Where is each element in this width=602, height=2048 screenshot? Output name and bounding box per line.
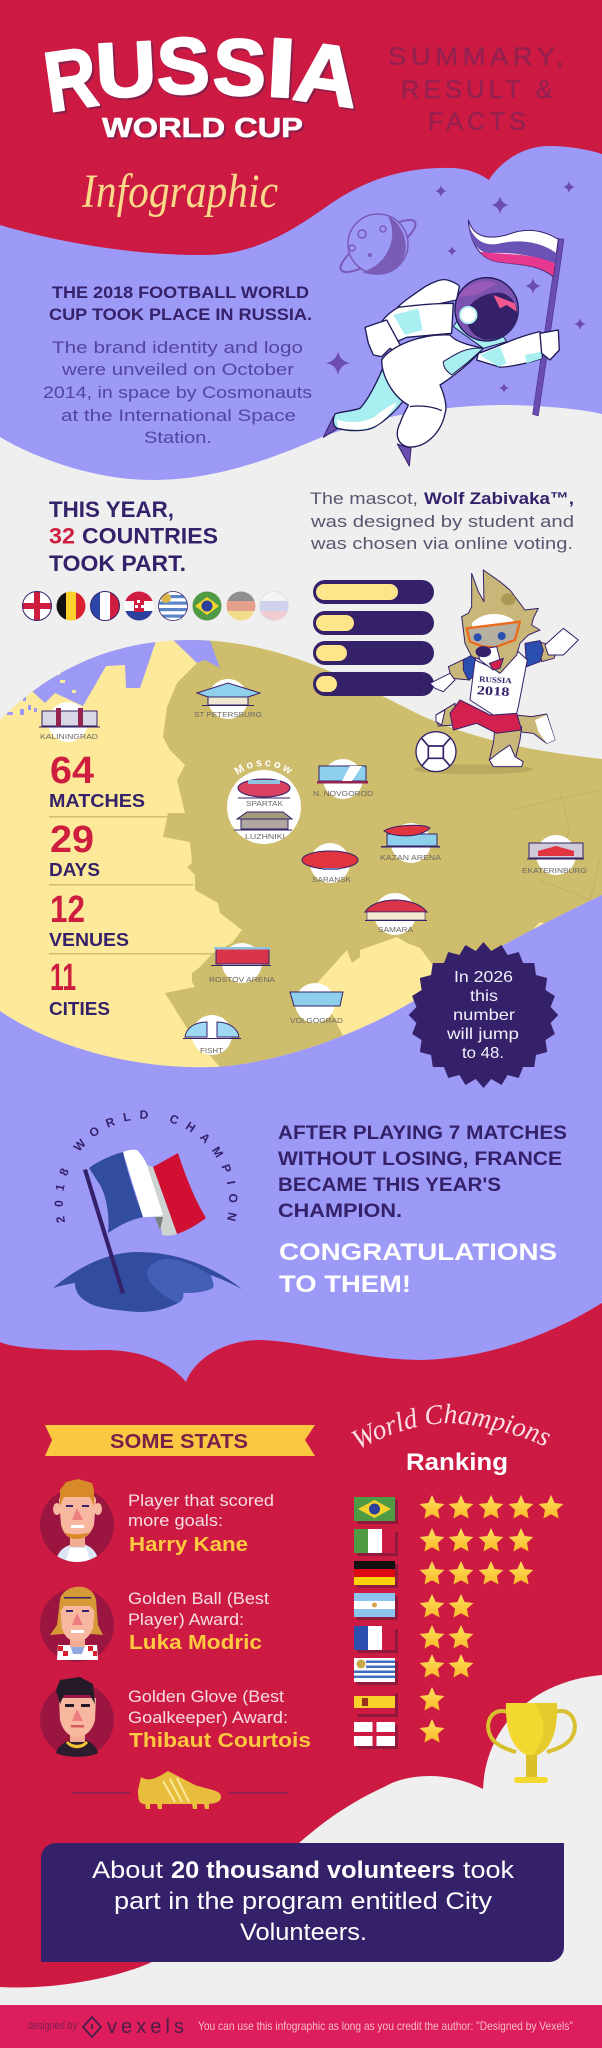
flag pole (533, 238, 564, 416)
callout badge: in 2026 this number will jump to 48: In 2026 (454, 969, 513, 986)
flags row: participating countries (22, 591, 289, 621)
callout: volunteers: took (463, 1857, 515, 1884)
title: Russia World Cup: WORLD CUP (102, 112, 303, 143)
sparkles around astronaut (326, 181, 586, 393)
flag: France (354, 1626, 395, 1650)
pole (83, 1169, 125, 1294)
stat: matches days venues cities: 64 (50, 750, 94, 792)
stat: matches days venues cities: 11 (50, 957, 76, 999)
icon: astronaut holding Russian flag (323, 220, 564, 466)
player: Thibaut Courtois: Thibaut Courtois (129, 1730, 311, 1752)
player: Harry Kane: more goals: (128, 1511, 223, 1530)
title: Russia World Cup: S (211, 22, 268, 113)
text: mascot description (310, 489, 574, 553)
text: mascot description: Wolf Zabivaka™, (424, 489, 574, 508)
avatar (40, 1479, 114, 1564)
title: Russia World Cup: I (264, 21, 299, 116)
intro text block: The brand identity and logo (52, 338, 303, 357)
heading: 32 countries took part: 32 (49, 524, 75, 548)
text: France champion (278, 1123, 567, 1222)
ribbon: some stats (45, 1425, 315, 1456)
stadium: Fisht (183, 1015, 241, 1055)
shirt with logo (470, 652, 527, 715)
player: Luka Modric (40, 1587, 269, 1662)
map: russia landmass and sea (7, 630, 602, 1075)
callout: volunteers: 20 thousand volunteers (171, 1857, 455, 1884)
icon: mascot Zabivaka with ball (413, 570, 578, 774)
title: Russia World Cup: A (288, 24, 365, 126)
stadium: N. Novgorod: N. NOVGOROD (313, 789, 374, 798)
flag: Italy (354, 1529, 395, 1553)
player: Harry Kane (40, 1479, 274, 1564)
stat: matches days venues cities (49, 750, 212, 1019)
stadium: Kazan Arena: KAZAN ARENA (380, 853, 441, 862)
avatar (40, 1587, 114, 1662)
baltic sea (32, 642, 156, 706)
heading: 32 countries took part (49, 497, 218, 576)
subtitle: summary result and facts: RESULT & (401, 76, 557, 104)
background: lavender wave (0, 146, 602, 620)
title: Russia World Cup: U (93, 26, 159, 115)
right glove (540, 330, 559, 360)
head (462, 570, 540, 673)
heading: 32 countries took part: TOOK PART. (49, 551, 186, 576)
yellow patch east (532, 922, 544, 930)
stadium group: Moscow (227, 760, 301, 844)
arctic sea (174, 640, 220, 668)
callout: volunteers: part in the program entitled City (114, 1888, 492, 1915)
legs (436, 703, 455, 726)
flag: Argentina (354, 1593, 395, 1617)
stadium: Kaliningrad (39, 702, 100, 742)
shirt sleeves (463, 653, 477, 680)
stat: matches days venues cities: CITIES (49, 998, 110, 1019)
player: Harry Kane: Player that scored (128, 1491, 274, 1510)
stadium: Saransk (302, 843, 358, 884)
player: Thibaut Courtois: Golden Glove (Best (128, 1687, 284, 1706)
callout badge: in 2026 this number will jump to 48: will jump (446, 1026, 519, 1043)
intro text block (43, 284, 312, 447)
callout badge: in 2026 this number will jump to 48: to 48. (462, 1045, 504, 1062)
title: Russia World Cup: R (38, 29, 103, 130)
land texture cracks (510, 790, 600, 900)
right arm (477, 332, 543, 367)
callout: volunteers: Volunteers. (240, 1919, 367, 1946)
left sleeve (382, 303, 453, 342)
icon: trophy (488, 1703, 575, 1783)
player: Luka Modric: Player) Award: (128, 1610, 244, 1629)
flag: Germany (354, 1561, 395, 1585)
player: Luka Modric: Golden Ball (Best (128, 1589, 269, 1608)
intro text block: CUP TOOK PLACE IN RUSSIA. (49, 306, 312, 324)
player: Thibaut Courtois: Goalkeeper) Award: (128, 1708, 288, 1727)
arms (448, 658, 470, 680)
stadium: St Petersburg: ST PETERSBURG (194, 710, 262, 719)
helmet (453, 278, 518, 348)
curved text: 2018 WORLD CHAMPION (54, 1110, 238, 1223)
background: lower lavender section (0, 895, 602, 1400)
stat: matches days venues cities: VENUES (49, 929, 129, 950)
hill (53, 1252, 242, 1312)
intro text block: at the International Space (61, 406, 296, 425)
boots (323, 417, 411, 466)
ball (416, 732, 456, 772)
torso and front leg (382, 335, 483, 447)
stadium: N. Novgorod (313, 759, 374, 799)
script heading: world champions ranking (351, 1404, 550, 1476)
script heading: world champions ranking: Ranking (406, 1449, 508, 1476)
callout: volunteers (41, 1843, 564, 1962)
heading: 32 countries took part: COUNTRIES (82, 524, 218, 548)
back leg (333, 368, 405, 431)
shirt with logo: RUSSIA (479, 675, 512, 685)
subtitle: summary result and facts (388, 43, 568, 136)
background: bottom grey cloud (0, 1675, 602, 2010)
ball shadow (413, 764, 533, 774)
footer: vexels credit (0, 2005, 602, 2048)
stadium: Ekaterinburg: EKATERINBURG (522, 866, 587, 875)
stadium: Kaliningrad: KALININGRAD (40, 732, 99, 741)
stat: matches days venues cities: 12 (50, 889, 85, 931)
intro text block: were unveiled on October (61, 360, 294, 379)
stadium: Samara: SAMARA (378, 925, 413, 934)
flag: Brazil (354, 1497, 395, 1521)
text: mascot description: was designed by student and (310, 512, 574, 531)
title: Russia World Cup: S (156, 21, 211, 111)
intro text block: Station. (144, 428, 212, 447)
ribbon: some stats: SOME STATS (110, 1431, 248, 1453)
intro text block: THE 2018 FOOTBALL WORLD (52, 284, 309, 302)
france flag (89, 1150, 206, 1236)
text: France champion: WITHOUT LOSING, FRANCE (278, 1149, 562, 1170)
text: France champion: BECAME THIS YEAR'S (278, 1175, 501, 1196)
heading: 32 countries took part: THIS YEAR, (49, 497, 174, 522)
callout badge: in 2026 this number will jump to 48 (409, 942, 558, 1088)
icon: 2018 world champion badge with France flag (53, 1110, 242, 1312)
ranking flags (354, 1497, 398, 1749)
stadium: Spartak: SPARTAK (246, 799, 283, 808)
stat: matches days venues cities: 29 (50, 819, 94, 861)
stadium: Rostov Arena: ROSTOV ARENA (209, 975, 275, 984)
stat: matches days venues cities: MATCHES (49, 790, 145, 811)
player: Thibaut Courtois (40, 1677, 311, 1757)
text: France champion: AFTER PLAYING 7 MATCHES (278, 1123, 567, 1144)
text: mascot description: The mascot, (310, 489, 418, 508)
stadium: St Petersburg (194, 679, 262, 719)
flag: Uruguay (354, 1658, 395, 1682)
subtitle: summary result and facts: SUMMARY, (388, 43, 568, 71)
star rating (420, 1495, 563, 1743)
tail (515, 714, 555, 743)
flag shadows (357, 1500, 398, 1749)
icon: planet with ring (335, 212, 421, 280)
stadium: Saransk: SARANSK (312, 875, 351, 884)
stadium: Samara (365, 893, 427, 935)
footer: vexels credit: vexels (107, 2016, 184, 2038)
callout badge: in 2026 this number will jump to 48: number (453, 1007, 516, 1024)
player: Harry Kane: Harry Kane (129, 1534, 248, 1556)
stadium: Volgograd (290, 983, 344, 1025)
text: congratulations (279, 1239, 557, 1298)
stadium: Rostov Arena (209, 943, 275, 984)
footer: vexels credit: designed by (28, 2020, 77, 2032)
text: congratulations: CONGRATULATIONS (279, 1239, 557, 1266)
text: France champion: CHAMPION. (278, 1201, 402, 1222)
script heading: Infographic: Infographic (81, 165, 278, 218)
backpack (396, 280, 459, 310)
background: top red band (0, 0, 602, 300)
mascot progress bars (313, 580, 434, 696)
shorts (450, 700, 522, 733)
flag: Spain (354, 1690, 395, 1714)
russia dark land (163, 630, 602, 1075)
stat: matches days venues cities: DAYS (49, 859, 100, 880)
callout badge: in 2026 this number will jump to 48: this (470, 988, 498, 1005)
shirt with logo: 2018 (477, 683, 510, 699)
background: lower red section (0, 1303, 602, 2010)
subtitle: summary result and facts: FACTS (428, 108, 530, 136)
left glove (365, 320, 401, 357)
stadium: Fisht: FISHT (200, 1046, 223, 1055)
muzzle (477, 647, 500, 670)
stadium: Kazan Arena (380, 823, 441, 863)
player: Luka Modric: Luka Modric (129, 1632, 262, 1654)
stadium group: Moscow: Moscow (234, 760, 292, 775)
script heading: world champions ranking: World Champions (351, 1404, 550, 1448)
text: congratulations: TO THEM! (279, 1271, 411, 1298)
background: grey wave (0, 405, 602, 1100)
stadium: Luzhniki: LUZHNIKI (245, 832, 285, 841)
icon: golden boot with side rules (72, 1771, 288, 1809)
callout: volunteers: About (92, 1857, 163, 1884)
text: mascot description: was chosen via online voting. (310, 534, 573, 553)
avatar (40, 1677, 114, 1757)
stadium: Volgograd: VOLGOGRAD (290, 1016, 344, 1025)
intro text block: 2014, in space by Cosmonauts (43, 383, 312, 402)
flag: England (354, 1722, 395, 1746)
stadium: Ekaterinburg (522, 835, 587, 875)
sea speckles (7, 696, 37, 715)
russian flag (468, 220, 558, 277)
title: Russia World Cup (38, 21, 365, 143)
map background shape (0, 640, 602, 1067)
goggles (467, 622, 520, 647)
icon: vexels diamond (83, 2017, 101, 2037)
